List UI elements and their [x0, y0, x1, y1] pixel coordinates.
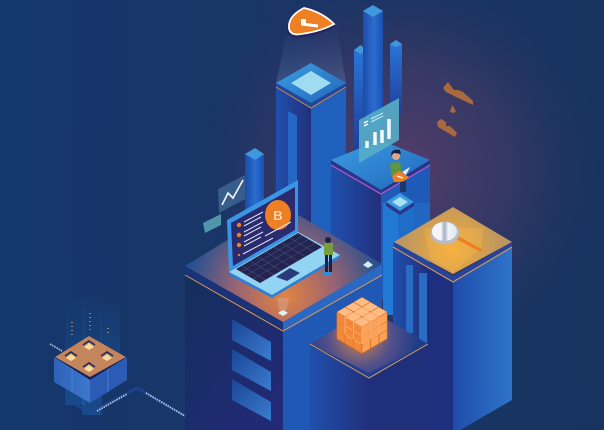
orange cube stack — [336, 297, 388, 354]
small teal panel — [203, 214, 221, 233]
slender tower centre — [363, 5, 383, 131]
top — [54, 336, 127, 380]
circuit trace — [68, 388, 185, 416]
slender tower right — [390, 40, 402, 114]
line chart panel — [218, 175, 245, 213]
dotted lines — [50, 344, 185, 416]
bottom-left device — [50, 290, 185, 416]
magnifying glass — [430, 222, 480, 250]
corner lamp — [277, 298, 289, 316]
shield icon — [287, 8, 336, 38]
list — [237, 212, 291, 256]
glass bar chart panel — [359, 98, 399, 163]
faint orange chart at right — [437, 82, 473, 137]
cube platform — [310, 309, 428, 430]
body — [54, 357, 90, 403]
right lamp — [363, 261, 373, 268]
platform with chart — [331, 140, 430, 300]
bitcoin coin: B — [273, 208, 283, 223]
deck — [229, 232, 340, 295]
laptop — [227, 180, 340, 298]
light columns — [65, 290, 120, 415]
sparks — [72, 313, 108, 336]
chips — [65, 341, 113, 372]
keyboard — [236, 233, 322, 283]
standing man — [322, 237, 333, 276]
inner light square — [291, 71, 331, 95]
slender tower left — [354, 45, 367, 150]
panel header — [371, 113, 383, 122]
gold building — [393, 207, 512, 430]
shield beam — [276, 28, 346, 83]
small tower by laptop — [245, 148, 264, 224]
windows — [232, 319, 271, 421]
bars — [367, 119, 389, 148]
trackpad — [276, 268, 300, 281]
tall building — [276, 63, 346, 235]
light beam on top — [424, 228, 483, 272]
sitting man — [390, 150, 410, 192]
laptop platform — [185, 206, 382, 430]
screen — [227, 180, 298, 272]
pedestal tower — [383, 193, 430, 315]
